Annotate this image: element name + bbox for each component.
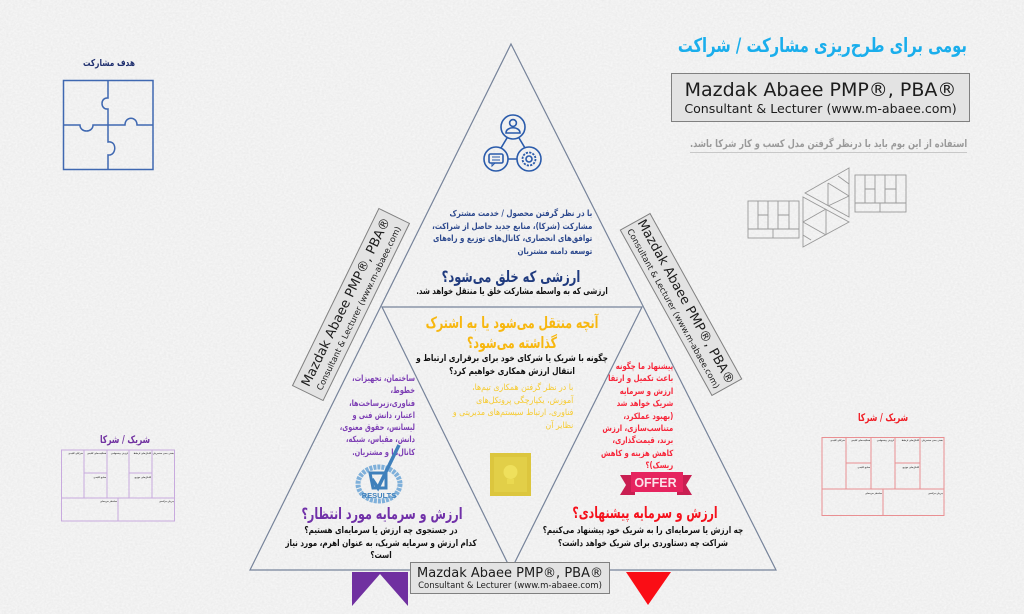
text: expected value description bbox=[340, 374, 416, 458]
heading: value created: ارزشی که خلق می‌شود؟ bbox=[442, 268, 580, 286]
icon: offer ribbon bbox=[620, 472, 692, 495]
text: value created description bbox=[432, 208, 592, 256]
logo box: right rotated: Mazdak Abaee PMP®, PBA® bbox=[634, 217, 737, 387]
partner canvas: red: شرکای کلیدی bbox=[830, 439, 845, 442]
icon: light bulb card bbox=[490, 453, 531, 496]
text: expected value question: در جستجوی چه ارزش یا سرمایه‌ای هستیم؟ bbox=[304, 526, 458, 536]
partner canvas: purple: شرکای کلیدی bbox=[68, 452, 83, 455]
text: offered value question bbox=[543, 526, 743, 548]
partner canvas: purple: منابع کلیدی bbox=[94, 476, 107, 479]
text: transferred value description: با در نظر گرفتن همکاری تیم‌ها، bbox=[472, 383, 573, 393]
text: transferred value description bbox=[452, 382, 574, 431]
icon: results stamp bbox=[356, 444, 402, 504]
partner canvas: purple: فعالیت‌های کلیدی bbox=[87, 452, 107, 455]
logo box: bottom: Consultant & Lecturer (www.m-abaee.com) bbox=[418, 581, 602, 591]
icon: red triangle bbox=[626, 572, 671, 605]
text: offered value description: (بهبود عملکرد، bbox=[623, 412, 673, 422]
partner canvas: red: بخش بندی مشتریان bbox=[922, 439, 943, 442]
heading: transferred value: گذاشته می‌شود؟ bbox=[467, 334, 557, 352]
partner canvas: purple bbox=[61, 450, 175, 522]
logo box: left rotated: Mazdak Abaee PMP®, PBA® bbox=[299, 215, 394, 389]
icon: results stamp: RESULTS bbox=[362, 491, 396, 500]
logo box: left rotated: Consultant & Lecturer (www.m-abaee.com) bbox=[314, 225, 403, 392]
partner canvas: red: کانال‌های توزیع bbox=[902, 466, 920, 469]
logo box: bottom: Mazdak Abaee PMP®, PBA® bbox=[417, 566, 603, 581]
partner canvas: purple: ساختار هزینه‌ای bbox=[100, 500, 117, 503]
text: offered value question: چه ارزش یا سرمایه‌ای را به شریک خود پیشنهاد می‌کنیم؟ bbox=[543, 526, 743, 536]
text: value created description: توافق‌های انحصاری، کانال‌های توزیع و راه‌های bbox=[433, 234, 592, 244]
text: expected value question: کدام ارزش و سرمایه شریک، به عنوان اهرم، مورد نیاز bbox=[285, 538, 477, 548]
text: value created question: ارزشی که به واسطه مشارکت خلق یا منتقل خواهد شد. bbox=[416, 287, 608, 297]
text: transferred value question: انتقال ارزش همکاری خواهیم کرد؟ bbox=[449, 366, 575, 376]
subtitle note: استفاده از این بوم باید با درنظر گرفتن مدل کسب و کار شرکا باشد. bbox=[690, 138, 967, 150]
partner canvas: red bbox=[822, 437, 944, 516]
text: value created description: مشارکت (شرکا)، منابع جدید حاصل از شراکت، bbox=[432, 222, 592, 232]
text: offered value description: متناسب‌سازی، ارزش bbox=[602, 424, 673, 434]
icon: value network bbox=[483, 114, 542, 172]
partner canvas: red: جریان درآمدی bbox=[928, 492, 943, 495]
text: offered value description: باعث تکمیل و ارتقا bbox=[608, 374, 673, 384]
text: expected value description: فناوری،زیرساخت‌ها، bbox=[349, 399, 415, 409]
text: transferred value question bbox=[416, 352, 608, 376]
text: expected value description: کانال‌ها و مشتریان. bbox=[352, 448, 415, 458]
logo box: header: Consultant & Lecturer (www.m-abaee.com) bbox=[684, 101, 957, 116]
text: offered value description: شریک خواهد شد bbox=[616, 399, 673, 409]
partner canvas: purple: ارزش پیشنهادی bbox=[111, 452, 128, 455]
mini diagram: canvases and triangles bbox=[748, 167, 906, 248]
logo box: header bbox=[671, 73, 970, 122]
partner canvas: red: منابع کلیدی bbox=[858, 466, 871, 469]
text: transferred value question: چگونه با شریک یا شرکای خود برای برقراری ارتباط و bbox=[416, 354, 608, 364]
partner canvas: purple: بخش بندی مشتریان bbox=[153, 452, 174, 455]
logo box: bottom bbox=[410, 562, 610, 594]
partner canvas: red: فعالیت‌های کلیدی bbox=[851, 439, 871, 442]
heading: expected value: ارزش و سرمایه مورد انتظار؟ bbox=[301, 505, 463, 523]
text: offered value question: شراکت چه دستاوردی برای شریک خواهد داشت؟ bbox=[558, 538, 728, 548]
text: offered value description bbox=[601, 361, 674, 471]
icon: offer ribbon: OFFER bbox=[634, 476, 677, 490]
heading: transferred value: آنچه منتقل می‌شود یا به اشترک bbox=[426, 314, 598, 332]
text: transferred value description: نظایر آن bbox=[545, 421, 573, 431]
logo box: header: Mazdak Abaee PMP®, PBA® bbox=[685, 79, 956, 101]
text: expected value description: دانش، مقیاس، شبکه، bbox=[346, 435, 415, 445]
text: expected value description: لیسانس، حقوق معنوی، bbox=[340, 423, 415, 433]
text: expected value description: خطوط، bbox=[391, 386, 415, 396]
text: expected value description: ساختمان، تجهیزات، bbox=[352, 374, 415, 384]
partner canvas: red: کانال‌های ارتباط bbox=[901, 439, 920, 442]
title: بومی برای طرح‌ریزی مشارکت / شراکت bbox=[678, 34, 967, 57]
text: offered value description: پیشنهاد ما چگونه bbox=[616, 362, 673, 372]
partner canvas: purple: کانال‌های ارتباط bbox=[133, 452, 152, 455]
icon: puzzle bbox=[62, 80, 154, 170]
goal heading: هدف مشارکت bbox=[83, 58, 135, 69]
partner canvas: red: ساختار هزینه‌ای bbox=[865, 492, 882, 495]
text: offered value description: برند، قیمت‌گذاری، bbox=[612, 436, 673, 446]
heading: transferred value bbox=[426, 313, 599, 352]
text: value created description: توسعه دامنه مشتریان bbox=[517, 246, 592, 256]
text: expected value question bbox=[285, 526, 477, 561]
text: offered value description: کاهش هزینه و کاهش bbox=[601, 449, 673, 459]
partner canvas: purple: کانال‌های توزیع bbox=[134, 476, 152, 479]
text: transferred value description: آموزش، یکپارچگی پروتکل‌های bbox=[476, 396, 573, 406]
text: offered value description: ریسک)؟ bbox=[645, 461, 673, 471]
partner canvas heading: purple: شریک / شرکا bbox=[100, 434, 150, 446]
heading: offered value: ارزش و سرمایه پیشنهادی؟ bbox=[572, 504, 718, 522]
partner canvas heading: red: شریک / شرکا bbox=[858, 412, 908, 424]
text: value created description: با در نظر گرفتن محصول / خدمت مشترک bbox=[449, 209, 592, 219]
partner canvas: purple: جریان درآمدی bbox=[159, 500, 174, 503]
partner canvas: red: ارزش پیشنهادی bbox=[877, 439, 894, 442]
text: expected value question: است؟ bbox=[370, 551, 392, 561]
icon: purple banner bbox=[352, 572, 408, 606]
text: expected value description: اعتبار، دانش فنی و bbox=[353, 411, 415, 421]
text: transferred value description: فناوری، ارتباط سیستم‌های مدیریتی و bbox=[453, 408, 573, 418]
text: offered value description: ارزش و سرمایه bbox=[620, 387, 673, 397]
logo box: right rotated: Consultant & Lecturer (www.m-abaee.com) bbox=[625, 227, 722, 390]
